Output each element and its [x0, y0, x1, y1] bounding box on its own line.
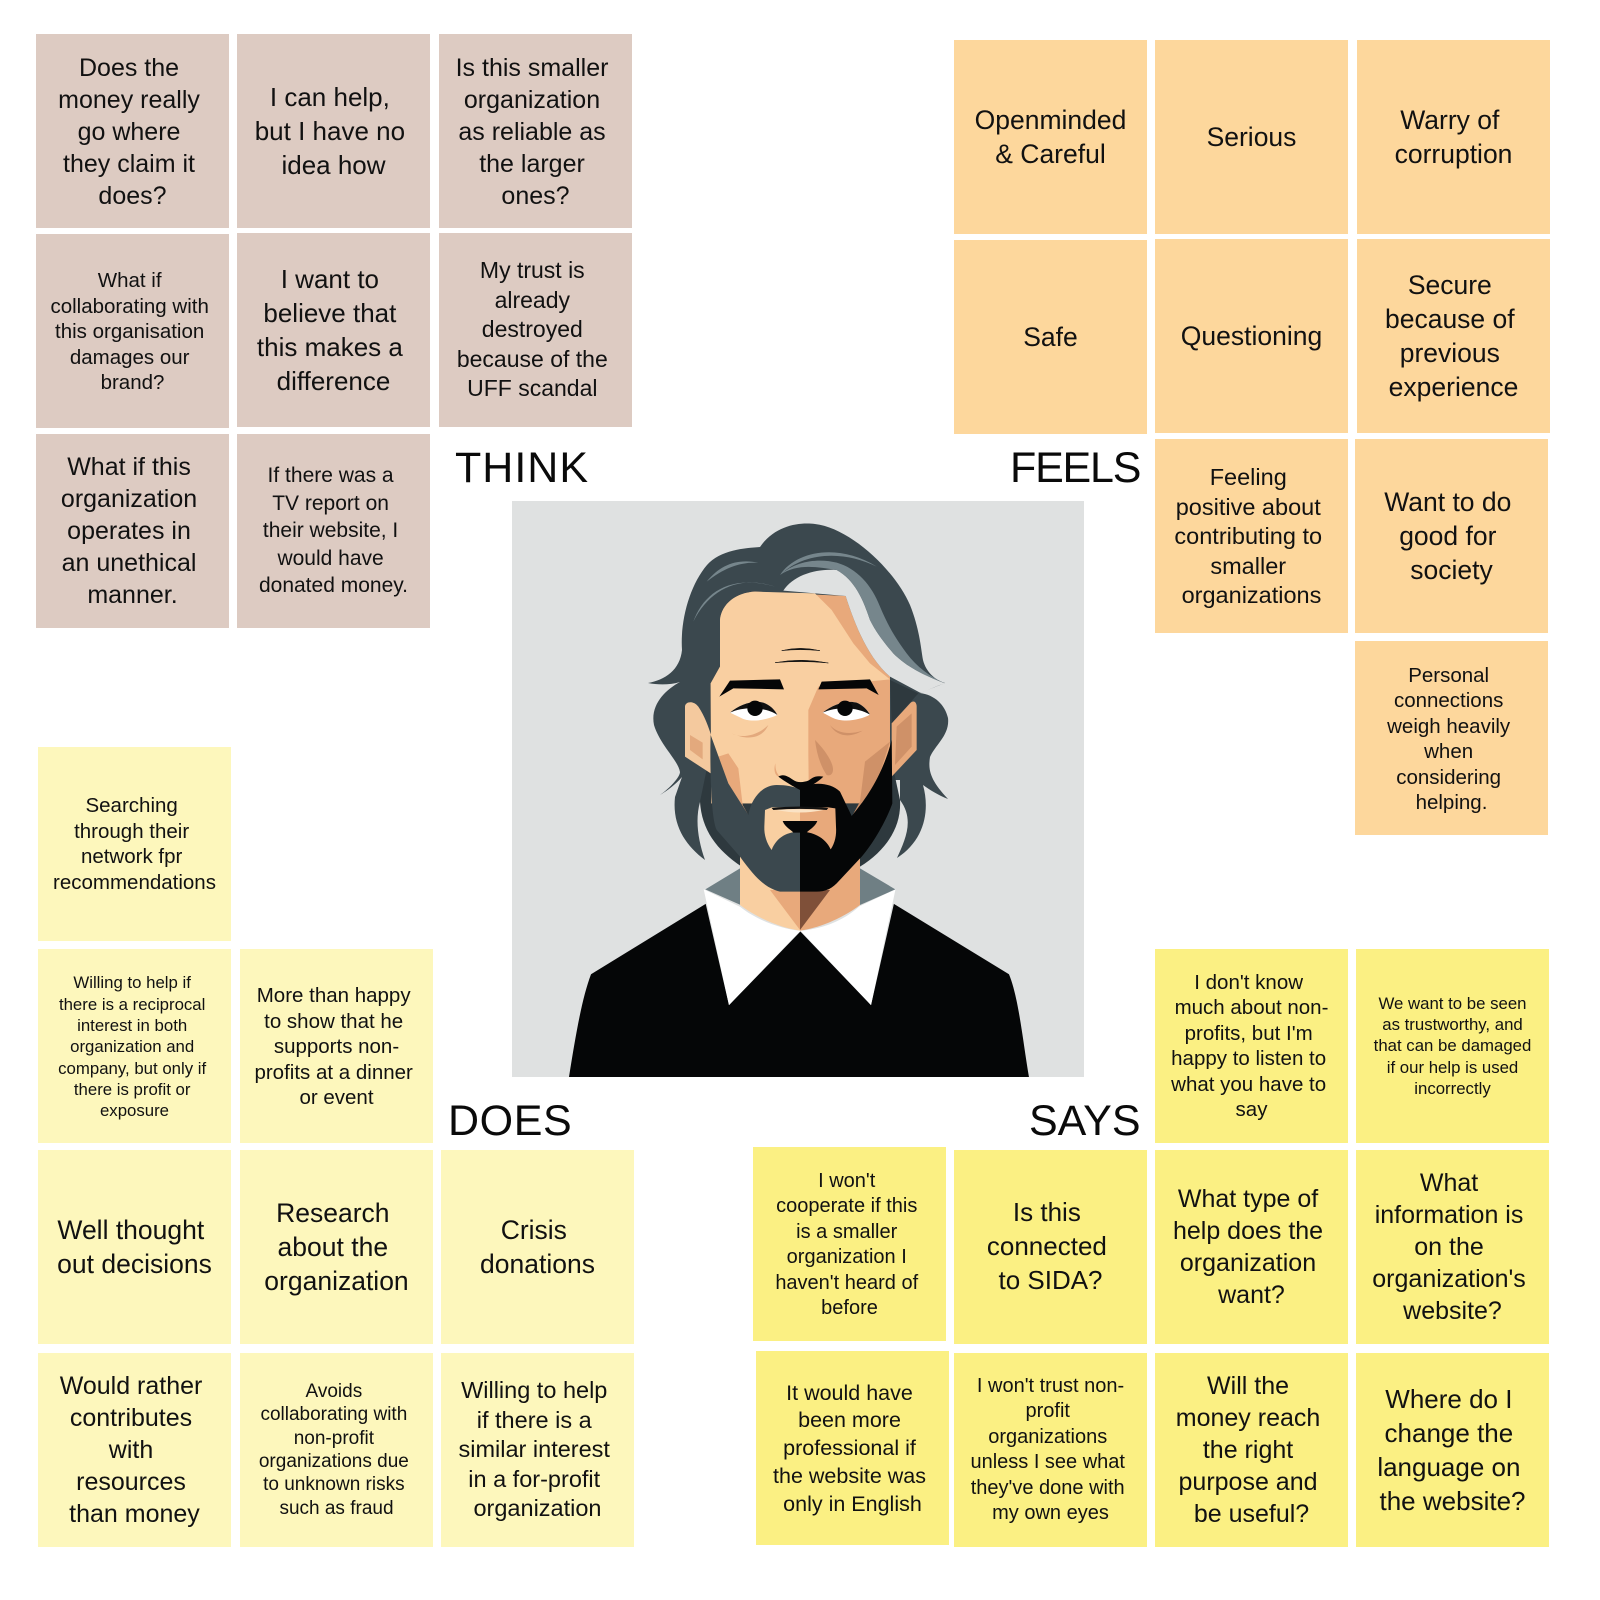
note: unethical — [36, 434, 229, 628]
note: crisis donations — [441, 1150, 634, 1344]
note: SIDA: to SIDA? — [998, 1265, 1103, 1295]
note: secure: previous — [1400, 338, 1500, 368]
note: personal connections: Personal — [1408, 664, 1489, 686]
note: personal connections: considering — [1396, 766, 1501, 788]
note: avoids collaborating: non-profit — [294, 1428, 374, 1449]
note: openminded: Openminded — [975, 105, 1126, 135]
note: searching network: recommendations — [53, 870, 216, 894]
note: I want to believe: difference — [277, 366, 390, 396]
note: TV report — [237, 434, 430, 628]
heading: think: THINK — [455, 444, 589, 492]
note: SIDA — [954, 1150, 1147, 1344]
note: TV report: donated money. — [259, 574, 408, 597]
note: crisis donations: donations — [480, 1249, 595, 1279]
note: openminded: & Careful — [995, 139, 1106, 169]
note: feeling positive: smaller — [1210, 553, 1286, 579]
note: warry of corruption: corruption — [1395, 139, 1512, 169]
note: what type of help: What type of — [1178, 1185, 1318, 1213]
note: questioning: Questioning — [1181, 321, 1322, 351]
note: research: organization — [264, 1266, 409, 1296]
note: only in english: only in English — [783, 1492, 922, 1516]
note: what type of help: help does the — [1173, 1217, 1323, 1245]
note: unethical: manner. — [87, 581, 178, 609]
note: feeling positive: Feeling — [1210, 464, 1287, 490]
note: will the money: Will the — [1207, 1372, 1289, 1400]
note: I don't know: what you have to — [1171, 1072, 1326, 1096]
note: safe: Safe — [1023, 322, 1078, 352]
note: my trust: UFF scandal — [467, 375, 597, 401]
note: reciprocal interest: interest in both — [77, 1016, 187, 1035]
heading: feels: FEELS — [1010, 444, 1140, 492]
neck and lower beard — [700, 753, 900, 931]
note: collaborating: this organisation — [55, 320, 204, 343]
note: what information: What — [1420, 1169, 1478, 1197]
note: more than happy: More than happy — [257, 984, 411, 1007]
note: more than happy: supports non- — [274, 1035, 399, 1058]
note: avoids collaborating: Avoids — [306, 1381, 362, 1402]
note: I won't cooperate: is a smaller — [796, 1220, 897, 1242]
note: smaller organization: the larger — [479, 150, 585, 178]
note: trustworthy: We want to be seen — [1378, 994, 1527, 1013]
note: more than happy: profits at a dinner — [254, 1061, 413, 1084]
note: I want to believe: this makes a — [257, 332, 403, 362]
note: TV report: If there was a — [268, 464, 394, 487]
note: personal connections: weigh heavily — [1387, 714, 1510, 738]
note: I want to believe: I want to — [281, 264, 379, 294]
note: I won't cooperate: before — [821, 1297, 878, 1319]
note: similar interest: similar interest — [458, 1436, 610, 1462]
note: avoids collaborating — [240, 1353, 433, 1547]
note: I don't know: say — [1236, 1098, 1267, 1121]
note: won't trust: unless I see what — [970, 1451, 1125, 1473]
note: would rather: resources — [76, 1468, 186, 1496]
note: feeling positive: organizations — [1182, 582, 1321, 608]
note: collaborating: brand? — [101, 371, 164, 394]
note: unethical: an unethical — [62, 549, 196, 577]
note: more than happy: to show that he — [264, 1010, 403, 1033]
note: smaller organization — [439, 34, 632, 228]
note: SIDA: Is this — [1013, 1197, 1081, 1227]
note: won't trust: profit — [1025, 1400, 1070, 1422]
note: secure: Secure — [1408, 270, 1492, 300]
sweater and collar — [569, 889, 1029, 1077]
panel: says notes — [753, 949, 1549, 1547]
note: I want to believe — [237, 233, 430, 427]
portrait illustration — [512, 501, 1084, 1077]
note: personal connections: helping. — [1416, 791, 1487, 814]
note: does the money: Does the — [79, 54, 179, 82]
note: smaller organization: ones? — [501, 182, 570, 210]
note: would rather: Would rather — [60, 1372, 202, 1400]
note: what information: information is — [1375, 1201, 1523, 1229]
note: searching network: Searching — [85, 794, 178, 817]
note: change the language: the website? — [1380, 1486, 1525, 1516]
note: won't trust: my own eyes — [992, 1502, 1109, 1524]
note: reciprocal interest: there is profit or — [74, 1080, 190, 1099]
note: well thought: out decisions — [57, 1249, 212, 1279]
note: only in english: professional if — [783, 1436, 916, 1460]
note: collaborating: collaborating with — [50, 295, 209, 318]
note: will the money: money reach — [1176, 1404, 1320, 1432]
note: serious: Serious — [1207, 122, 1296, 152]
note: avoids collaborating: such as fraud — [279, 1498, 394, 1519]
note: similar interest: Willing to help — [461, 1377, 607, 1403]
note: does the money: money really — [58, 86, 200, 114]
note: won't trust: they've done with — [971, 1476, 1125, 1498]
note: change the language: change the — [1385, 1418, 1513, 1448]
note: reciprocal interest — [38, 949, 231, 1143]
note: I can help: I can help, — [270, 82, 390, 112]
note: want to do good: Want to do — [1384, 487, 1511, 517]
note: I don't know: happy to listen to — [1171, 1047, 1326, 1070]
note: research: about the — [278, 1232, 388, 1262]
note: what type of help: organization — [1180, 1249, 1316, 1277]
note: safe — [954, 240, 1147, 434]
note: secure: because of — [1385, 304, 1515, 334]
note: trustworthy — [1356, 949, 1549, 1143]
note: would rather: than money — [69, 1500, 200, 1528]
note: SIDA: connected — [987, 1231, 1107, 1261]
note: smaller organization: as reliable as — [458, 118, 606, 146]
note: searching network: network fpr — [81, 845, 182, 868]
note: what information: organization's — [1372, 1265, 1526, 1293]
note: what information: website? — [1403, 1297, 1502, 1325]
note: avoids collaborating: collaborating with — [260, 1404, 407, 1425]
note: does the money: does? — [98, 182, 167, 210]
note: avoids collaborating: to unknown risks — [263, 1474, 405, 1495]
note: searching network — [38, 747, 231, 941]
note: will the money: be useful? — [1194, 1500, 1309, 1528]
note: collaborating: What if — [98, 269, 162, 292]
note: trustworthy: that can be damaged — [1374, 1036, 1531, 1055]
note: I want to believe: believe that — [263, 298, 396, 328]
note: only in english — [756, 1351, 949, 1545]
note: I won't cooperate: I won't — [818, 1170, 875, 1192]
note: I can help: but I have no — [255, 116, 405, 146]
panel: think notes — [36, 34, 632, 628]
note: serious — [1155, 40, 1348, 234]
note: warry of corruption: Warry of — [1400, 105, 1499, 135]
note: I can help: idea how — [281, 150, 386, 180]
note: my trust: destroyed — [482, 316, 583, 342]
panel: feels notes — [954, 40, 1550, 835]
note: want to do good: good for — [1399, 521, 1496, 551]
note: I don't know: I don't know — [1194, 970, 1303, 994]
note: smaller organization: Is this smaller — [456, 54, 608, 82]
note: my trust: already — [495, 287, 570, 313]
note: change the language — [1356, 1353, 1549, 1547]
note: does the money — [36, 34, 229, 228]
note: does the money: they claim it — [63, 150, 195, 178]
note: secure — [1357, 239, 1550, 433]
note: TV report: TV report on — [272, 492, 389, 515]
note: similar interest: organization — [473, 1495, 602, 1521]
note: reciprocal interest: organization and — [70, 1037, 194, 1056]
note: want to do good: society — [1410, 555, 1493, 585]
note: unethical: operates in — [67, 517, 191, 545]
note: reciprocal interest: company, but only if — [58, 1059, 206, 1078]
note: what type of help: want? — [1218, 1281, 1285, 1309]
note: I don't know — [1155, 949, 1348, 1143]
note: unethical: What if this — [67, 453, 191, 481]
note: only in english: the website was — [773, 1464, 926, 1488]
note: personal connections — [1355, 641, 1548, 835]
note: TV report: their website, I — [263, 519, 398, 542]
note: I won't cooperate: organization I — [787, 1246, 907, 1268]
note: personal connections: connections — [1394, 689, 1503, 712]
note: research: Research — [276, 1198, 390, 1228]
note: research — [240, 1150, 433, 1344]
note: change the language: language on — [1377, 1452, 1520, 1482]
note: more than happy — [240, 949, 433, 1143]
note: what information: on the — [1414, 1233, 1484, 1261]
note: won't trust: I won't trust non- — [977, 1374, 1124, 1396]
note: would rather — [38, 1353, 231, 1547]
ears, face, hair streak, eyes — [685, 552, 945, 803]
note: I don't know: much about non- — [1175, 996, 1328, 1019]
note: feeling positive — [1155, 439, 1348, 633]
note: won't trust: organizations — [988, 1426, 1107, 1448]
heading: says: SAYS — [1029, 1097, 1141, 1145]
note: collaborating — [36, 234, 229, 428]
note: warry of corruption — [1357, 40, 1550, 234]
note: smaller organization: organization — [464, 86, 600, 114]
note: want to do good — [1355, 439, 1548, 633]
note: unethical: organization — [61, 485, 197, 513]
note: my trust: My trust is — [480, 257, 585, 283]
note: personal connections: when — [1424, 740, 1473, 763]
note: trustworthy: incorrectly — [1414, 1079, 1491, 1098]
note: crisis donations: Crisis — [501, 1215, 567, 1245]
note: searching network: through their — [74, 820, 189, 842]
note: will the money: the right — [1203, 1436, 1293, 1464]
note: similar interest — [441, 1353, 634, 1547]
note: what type of help — [1155, 1150, 1348, 1344]
note: well thought — [38, 1150, 231, 1344]
note: what information — [1356, 1150, 1549, 1344]
note: avoids collaborating: organizations due — [259, 1451, 409, 1472]
note: well thought: Well thought — [57, 1215, 204, 1245]
note: reciprocal interest: Willing to help if — [73, 973, 191, 992]
note: similar interest: in a for-profit — [468, 1466, 600, 1492]
note: I can help — [237, 34, 430, 228]
note: reciprocal interest: there is a reciprocal — [59, 995, 205, 1014]
note: only in english: It would have — [786, 1380, 913, 1404]
note: feeling positive: positive about — [1176, 494, 1321, 520]
note: similar interest: if there is a — [477, 1407, 592, 1433]
hair — [648, 523, 948, 860]
note: I won't cooperate — [753, 1147, 946, 1341]
note: will the money — [1155, 1353, 1348, 1547]
note: trustworthy: if our help is used — [1387, 1058, 1518, 1077]
note: collaborating: damages our — [70, 346, 189, 369]
note: my trust — [439, 233, 632, 427]
note: would rather: contributes — [70, 1404, 192, 1432]
note: will the money: purpose and — [1179, 1468, 1318, 1496]
note: trustworthy: as trustworthy, and — [1382, 1015, 1523, 1034]
note: does the money: go where — [78, 118, 180, 146]
beard and nose — [710, 735, 892, 892]
note: my trust: because of the — [457, 346, 608, 372]
note: won't trust — [954, 1353, 1147, 1547]
portrait background — [512, 501, 1084, 1077]
note: would rather: with — [109, 1436, 153, 1464]
note: openminded — [954, 40, 1147, 234]
note: I won't cooperate: haven't heard of — [775, 1272, 918, 1294]
note: more than happy: or event — [299, 1086, 374, 1109]
note: questioning — [1155, 239, 1348, 433]
note: reciprocal interest: exposure — [100, 1101, 169, 1120]
note: only in english: been more — [798, 1408, 901, 1432]
heading: does: DOES — [448, 1097, 572, 1145]
note: change the language: Where do I — [1385, 1384, 1512, 1414]
note: TV report: would have — [277, 547, 384, 570]
note: I won't cooperate: cooperate if this — [776, 1195, 917, 1217]
note: I don't know: profits, but I'm — [1185, 1022, 1313, 1044]
note: feeling positive: contributing to — [1174, 523, 1322, 549]
note: secure: experience — [1389, 372, 1518, 402]
panel: does notes — [38, 747, 634, 1547]
